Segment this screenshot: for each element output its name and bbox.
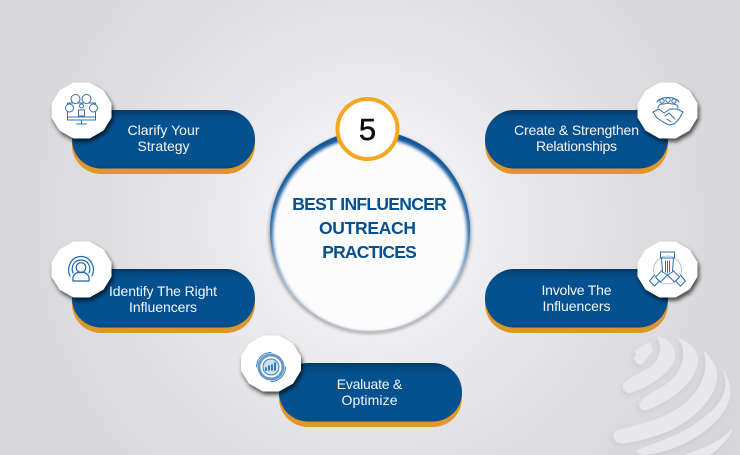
pill: create and strengthen relationships: [485, 110, 668, 174]
badge: create and strengthen relationships: [638, 82, 698, 138]
number 5: 5: [359, 112, 376, 147]
label: create and strengthen relationships: Create & Strengthen: [514, 122, 639, 138]
icon: monitor with strategy nodes: [66, 94, 98, 124]
label: identify the right influencers: Influencers: [129, 299, 197, 315]
heading: best influencer outreach practices: BEST INFLUENCER: [292, 194, 447, 214]
pill: involve the influencers: [485, 269, 668, 333]
label: clarify your strategy: Strategy: [138, 138, 190, 154]
badge: identify the right influencers: [52, 242, 112, 298]
label: involve the influencers: Involve The: [542, 282, 612, 298]
label: clarify your strategy: Clarify Your: [128, 122, 200, 138]
badge: evaluate and optimize: [241, 336, 301, 392]
label: involve the influencers: Influencers: [542, 298, 610, 314]
icon: person with signal rings: [69, 256, 93, 281]
globe watermark: [613, 336, 733, 455]
pill: evaluate and optimize: [279, 363, 462, 427]
icon: circular optimisation chart: [256, 352, 286, 382]
heading: best influencer outreach practices: OUTREACH: [319, 218, 416, 238]
label: evaluate and optimize: Optimize: [342, 392, 398, 408]
badge: involve the influencers: [638, 242, 698, 298]
icon: three joined hands: [650, 252, 686, 286]
heading: best influencer outreach practices: PRACTICES: [322, 242, 417, 262]
number badge: [338, 99, 398, 159]
pill: identify the right influencers: [72, 269, 255, 333]
label: identify the right influencers: Identify The Right: [109, 283, 217, 299]
central circle: [269, 130, 471, 334]
icon: handshake with people: [653, 98, 683, 125]
label: evaluate and optimize: Evaluate &: [337, 376, 403, 392]
pill: clarify your strategy: [72, 110, 255, 174]
badge: clarify your strategy: [52, 82, 112, 138]
label: create and strengthen relationships: Relationships: [536, 138, 617, 154]
